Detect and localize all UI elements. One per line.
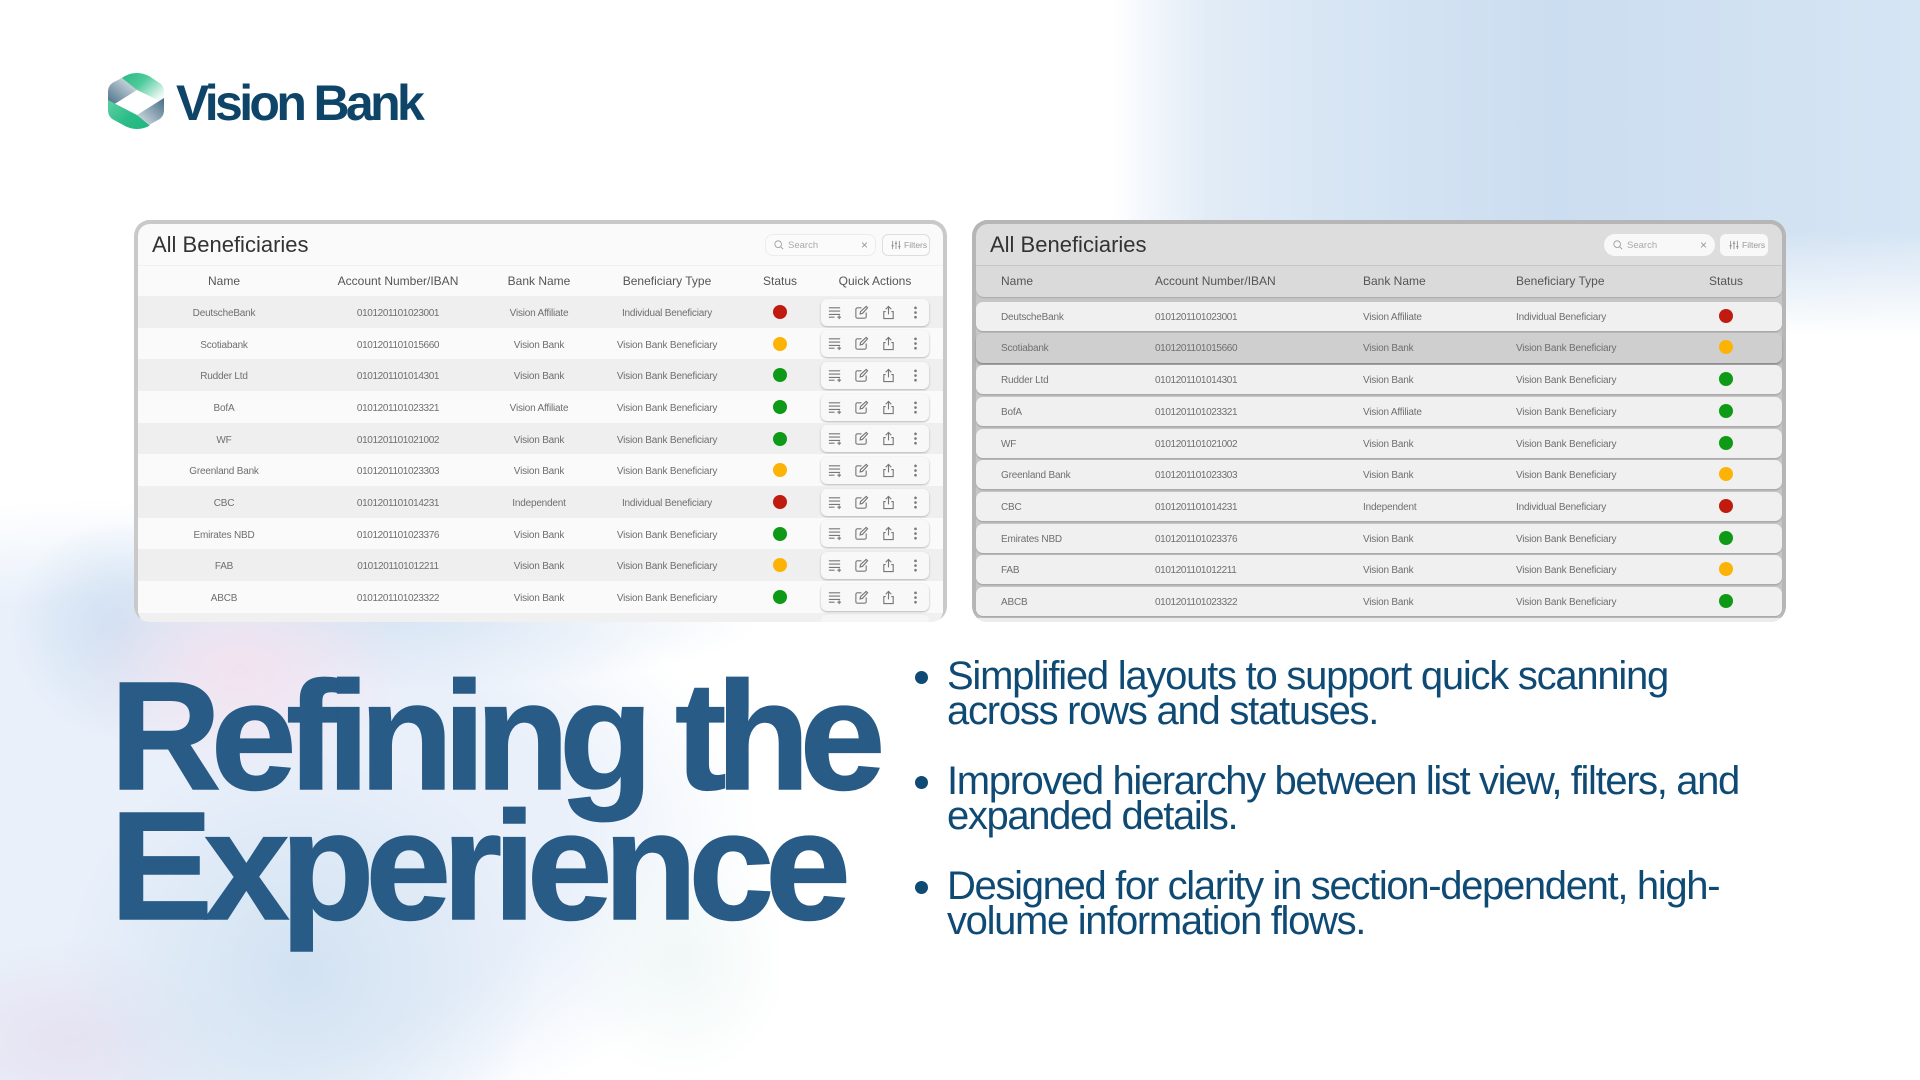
row: DeutscheBank: Individual Beneficiary (622, 308, 712, 319)
row: DeutscheBank: Vision Affiliate (1363, 312, 1422, 323)
row: Scotiabank: Vision Bank (514, 340, 564, 351)
row: DeutscheBank (976, 302, 1782, 331)
row: CBC (976, 492, 1782, 521)
row: CBC: Independent (512, 498, 566, 509)
row: BofA: 0101201101023321 (357, 403, 439, 414)
row: Scotiabank: 0101201101015660 (357, 340, 439, 351)
row: Emirates NBD: Emirates NBD (1001, 534, 1062, 545)
panel title bar (976, 224, 1782, 265)
search field: Search (1627, 240, 1657, 251)
bullet: improved hierarchy (915, 759, 1739, 838)
table header: Status (1709, 274, 1743, 288)
row: FAB: Vision Bank Beneficiary (617, 561, 717, 572)
bullet: simplified layouts: Simplified layouts to support quick scanning (947, 654, 1668, 698)
row: WF: 0101201101021002 (357, 435, 439, 446)
bullet: designed for clarity: Designed for clarity in section-dependent, high- (947, 864, 1719, 908)
row: Rudder Ltd: Rudder Ltd (200, 371, 248, 382)
row: ABCB: ABCB (1001, 597, 1027, 608)
row: CBC: 0101201101014231 (1155, 502, 1237, 513)
row: WF: Vision Bank Beneficiary (1516, 439, 1616, 450)
row: ABCB: Vision Bank Beneficiary (617, 593, 717, 604)
panel: beneficiaries table with quick actions (134, 220, 947, 622)
row: Rudder Ltd: Vision Bank (1363, 375, 1413, 386)
table header: Bank Name (508, 274, 570, 288)
table header: Beneficiary Type (623, 274, 711, 288)
table header: Account Number/IBAN (338, 274, 458, 288)
wordmark: Vision Bank (176, 75, 421, 131)
search field: × (861, 238, 868, 252)
row: Rudder Ltd (138, 359, 943, 391)
table header: Beneficiary Type (1516, 274, 1604, 288)
row: BofA (138, 391, 943, 423)
panel title bar (138, 224, 943, 265)
row: Scotiabank: Vision Bank Beneficiary (617, 340, 717, 351)
row: DeutscheBank: Individual Beneficiary (1516, 312, 1606, 323)
row: Rudder Ltd: 0101201101014301 (357, 371, 439, 382)
title: Experience (110, 780, 842, 952)
row: Emirates NBD: 0101201101023376 (1155, 534, 1237, 545)
row: Scotiabank (138, 328, 943, 360)
row: DeutscheBank: 0101201101023001 (357, 308, 439, 319)
row: CBC: 0101201101014231 (357, 498, 439, 509)
row: FAB: Vision Bank Beneficiary (1516, 565, 1616, 576)
row: Greenland Bank: Vision Bank Beneficiary (1516, 470, 1616, 481)
row: ABCB: Vision Bank Beneficiary (1516, 597, 1616, 608)
row: BofA: Vision Affiliate (510, 403, 568, 414)
row: FAB: FAB (215, 561, 233, 572)
row: FAB (138, 549, 943, 581)
row: BofA: Vision Bank Beneficiary (1516, 407, 1616, 418)
row: Greenland Bank: Greenland Bank (1001, 470, 1070, 481)
row: WF (138, 423, 943, 455)
panel title: All Beneficiaries (152, 232, 309, 257)
table header: Bank Name (1363, 274, 1426, 288)
row: Emirates NBD: Vision Bank (1363, 534, 1413, 545)
row: Emirates NBD (138, 518, 943, 550)
row: BofA: Vision Bank Beneficiary (617, 403, 717, 414)
row: CBC: CBC (1001, 502, 1022, 513)
row: Greenland Bank: Vision Bank (514, 466, 564, 477)
search field: × (1700, 238, 1707, 252)
row: Emirates NBD (976, 524, 1782, 553)
row: Scotiabank (hovered): Vision Bank Beneficiary (1516, 343, 1616, 354)
row: Scotiabank (hovered): Vision Bank (1363, 343, 1413, 354)
row: CBC: Individual Beneficiary (622, 498, 712, 509)
row: ABCB: Vision Bank (1363, 597, 1413, 608)
row: BofA: 0101201101023321 (1155, 407, 1237, 418)
row: Greenland Bank (976, 460, 1782, 489)
search field (1604, 234, 1715, 256)
row: FAB (976, 555, 1782, 584)
row: Scotiabank (hovered): 0101201101015660 (1155, 343, 1237, 354)
row: CBC (138, 486, 943, 518)
row: ABCB: 0101201101023322 (357, 593, 439, 604)
search field: Search (788, 240, 818, 251)
table header (138, 266, 943, 296)
row: FAB: Vision Bank (514, 561, 564, 572)
logo: Vision Bank (108, 73, 425, 131)
bullet: improved hierarchy: expanded details. (947, 794, 1237, 838)
bullet: simplified layouts: across rows and statuses. (947, 689, 1378, 733)
table header (976, 266, 1782, 297)
panel bottom strip (972, 618, 1786, 622)
search field (765, 234, 876, 256)
row: ABCB: 0101201101023322 (1155, 597, 1237, 608)
clipped next-row action box (821, 615, 929, 622)
row: FAB: 0101201101012211 (1155, 565, 1236, 576)
bullet: designed for clarity: volume information flows. (947, 899, 1365, 943)
row: WF: 0101201101021002 (1155, 439, 1237, 450)
filters button (882, 234, 930, 256)
table header: Status (763, 274, 797, 288)
row: Greenland Bank (138, 454, 943, 486)
row: CBC: Independent (1363, 502, 1416, 513)
row: Rudder Ltd (976, 365, 1782, 394)
row: FAB: 0101201101012211 (357, 561, 439, 572)
row: BofA (976, 397, 1782, 426)
row: Rudder Ltd: Rudder Ltd (1001, 375, 1048, 386)
row: Rudder Ltd: Vision Bank Beneficiary (617, 371, 717, 382)
filters button (1720, 234, 1768, 256)
table header: Name (208, 274, 240, 288)
row: Greenland Bank: Greenland Bank (189, 466, 259, 477)
row: CBC: Individual Beneficiary (1516, 502, 1606, 513)
bullet: designed for clarity (915, 864, 1719, 943)
row: DeutscheBank: DeutscheBank (1001, 312, 1064, 323)
table header: Name (1001, 274, 1033, 288)
row: Emirates NBD: Emirates NBD (194, 530, 254, 541)
row: Scotiabank (hovered): Scotiabank (1001, 343, 1048, 354)
row: ABCB (138, 581, 943, 613)
row: WF (976, 429, 1782, 458)
row: Rudder Ltd: Vision Bank (514, 371, 564, 382)
row: WF: WF (216, 435, 232, 446)
row: WF: WF (1001, 439, 1016, 450)
row: FAB: FAB (1001, 565, 1019, 576)
row: Scotiabank: Scotiabank (200, 340, 248, 351)
row: BofA: BofA (1001, 407, 1022, 418)
bullet: simplified layouts (915, 654, 1668, 733)
row: WF: Vision Bank (514, 435, 564, 446)
row: Greenland Bank: Vision Bank (1363, 470, 1413, 481)
panel title: All Beneficiaries (990, 232, 1147, 257)
row: Scotiabank (hovered) (976, 333, 1782, 363)
row: ABCB: Vision Bank (514, 593, 564, 604)
table header: Account Number/IBAN (1155, 274, 1276, 288)
row: DeutscheBank (138, 296, 943, 328)
row: WF: Vision Bank (1363, 439, 1413, 450)
row: ABCB (976, 587, 1782, 616)
row: ABCB: ABCB (211, 593, 237, 604)
row: FAB: Vision Bank (1363, 565, 1413, 576)
row: Greenland Bank: Vision Bank Beneficiary (617, 466, 717, 477)
panel: beneficiaries table with card rows (972, 220, 1786, 622)
row: DeutscheBank: Vision Affiliate (510, 308, 568, 319)
row: BofA: Vision Affiliate (1363, 407, 1422, 418)
row: Greenland Bank: 0101201101023303 (1155, 470, 1237, 481)
row: DeutscheBank: DeutscheBank (193, 308, 255, 319)
row: Emirates NBD: Vision Bank (514, 530, 564, 541)
icon: logo mark (108, 73, 164, 129)
row: Emirates NBD: 0101201101023376 (357, 530, 439, 541)
title (110, 650, 881, 952)
row: WF: Vision Bank Beneficiary (617, 435, 717, 446)
row: Emirates NBD: Vision Bank Beneficiary (617, 530, 717, 541)
row: Rudder Ltd: 0101201101014301 (1155, 375, 1237, 386)
row: Emirates NBD: Vision Bank Beneficiary (1516, 534, 1616, 545)
row: DeutscheBank: 0101201101023001 (1155, 312, 1237, 323)
table header: Quick Actions (839, 274, 911, 288)
title: Refining the (110, 650, 875, 822)
row: Greenland Bank: 0101201101023303 (357, 466, 439, 477)
bullet: improved hierarchy: Improved hierarchy between list view, filters, and (947, 759, 1739, 803)
filters button: Filters (904, 240, 927, 250)
filters button: Filters (1742, 240, 1765, 250)
row: CBC: CBC (214, 498, 234, 509)
row: Rudder Ltd: Vision Bank Beneficiary (1516, 375, 1616, 386)
row: BofA: BofA (214, 403, 234, 414)
